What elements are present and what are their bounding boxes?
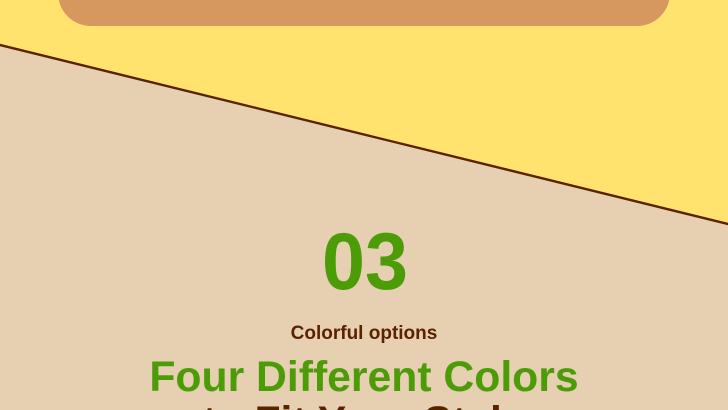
orange rounded panel [58, 0, 670, 26]
headline: Four Different Colors [149, 353, 579, 401]
eyebrow label: Colorful options [291, 323, 437, 344]
section number: 03 [322, 217, 408, 307]
